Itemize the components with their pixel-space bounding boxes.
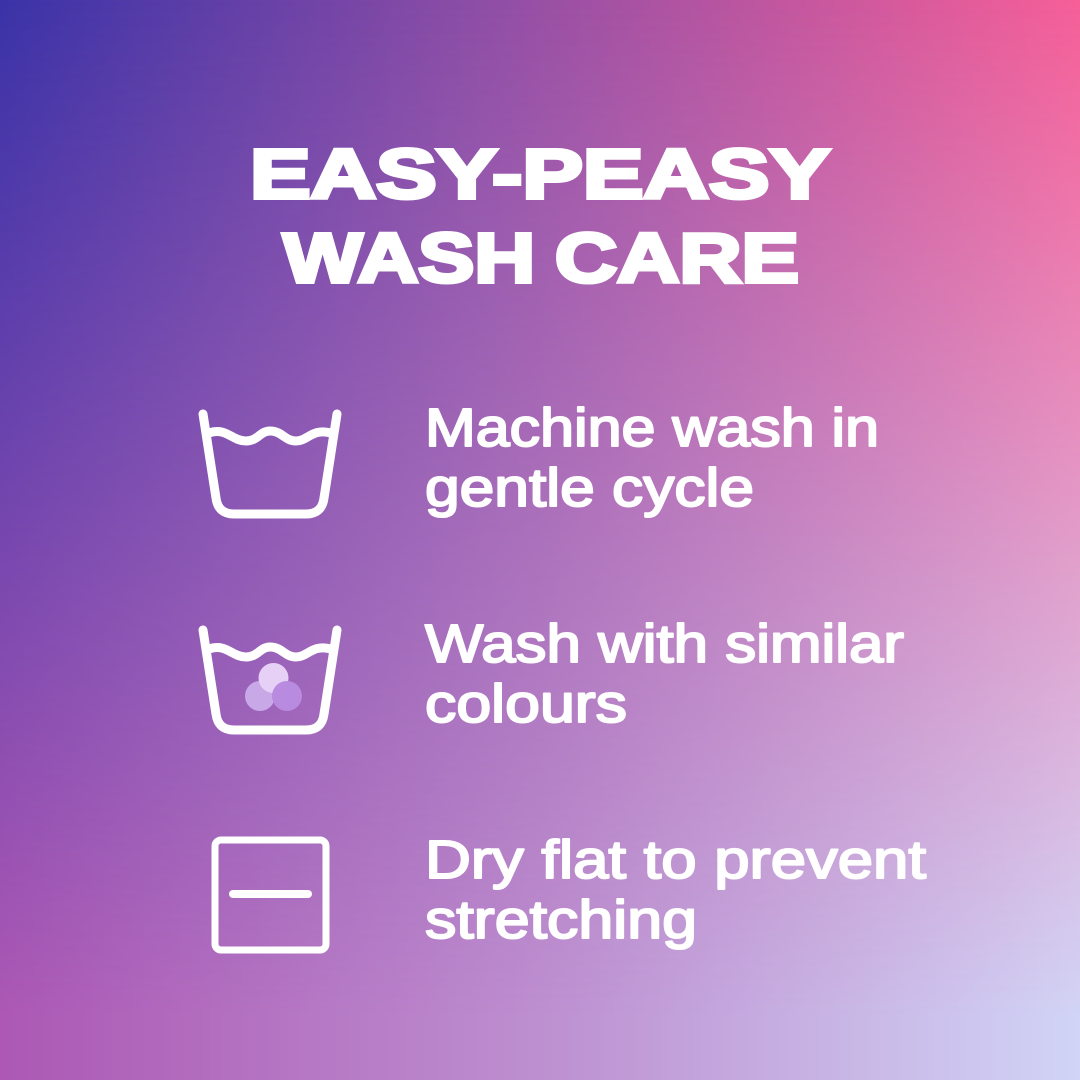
title	[250, 135, 830, 297]
text: dry flat: stretching	[425, 890, 697, 950]
text: similar colours: Wash with similar	[425, 614, 904, 674]
text: dry flat: Dry flat to prevent	[425, 830, 926, 890]
title: WASH	[283, 219, 535, 297]
icon: dry flat	[215, 840, 326, 950]
icon: machine wash tub	[203, 414, 337, 514]
text: machine wash	[425, 398, 879, 518]
text: similar colours: colours	[425, 674, 627, 734]
title: CARE	[555, 219, 799, 297]
text: similar colours	[425, 614, 904, 734]
text: machine wash: Machine wash in	[425, 398, 879, 458]
text: dry flat	[425, 830, 926, 950]
text: machine wash: gentle cycle	[425, 458, 754, 518]
icon: tub with coloured balls	[203, 630, 337, 730]
title: EASY-PEASY	[250, 135, 830, 213]
